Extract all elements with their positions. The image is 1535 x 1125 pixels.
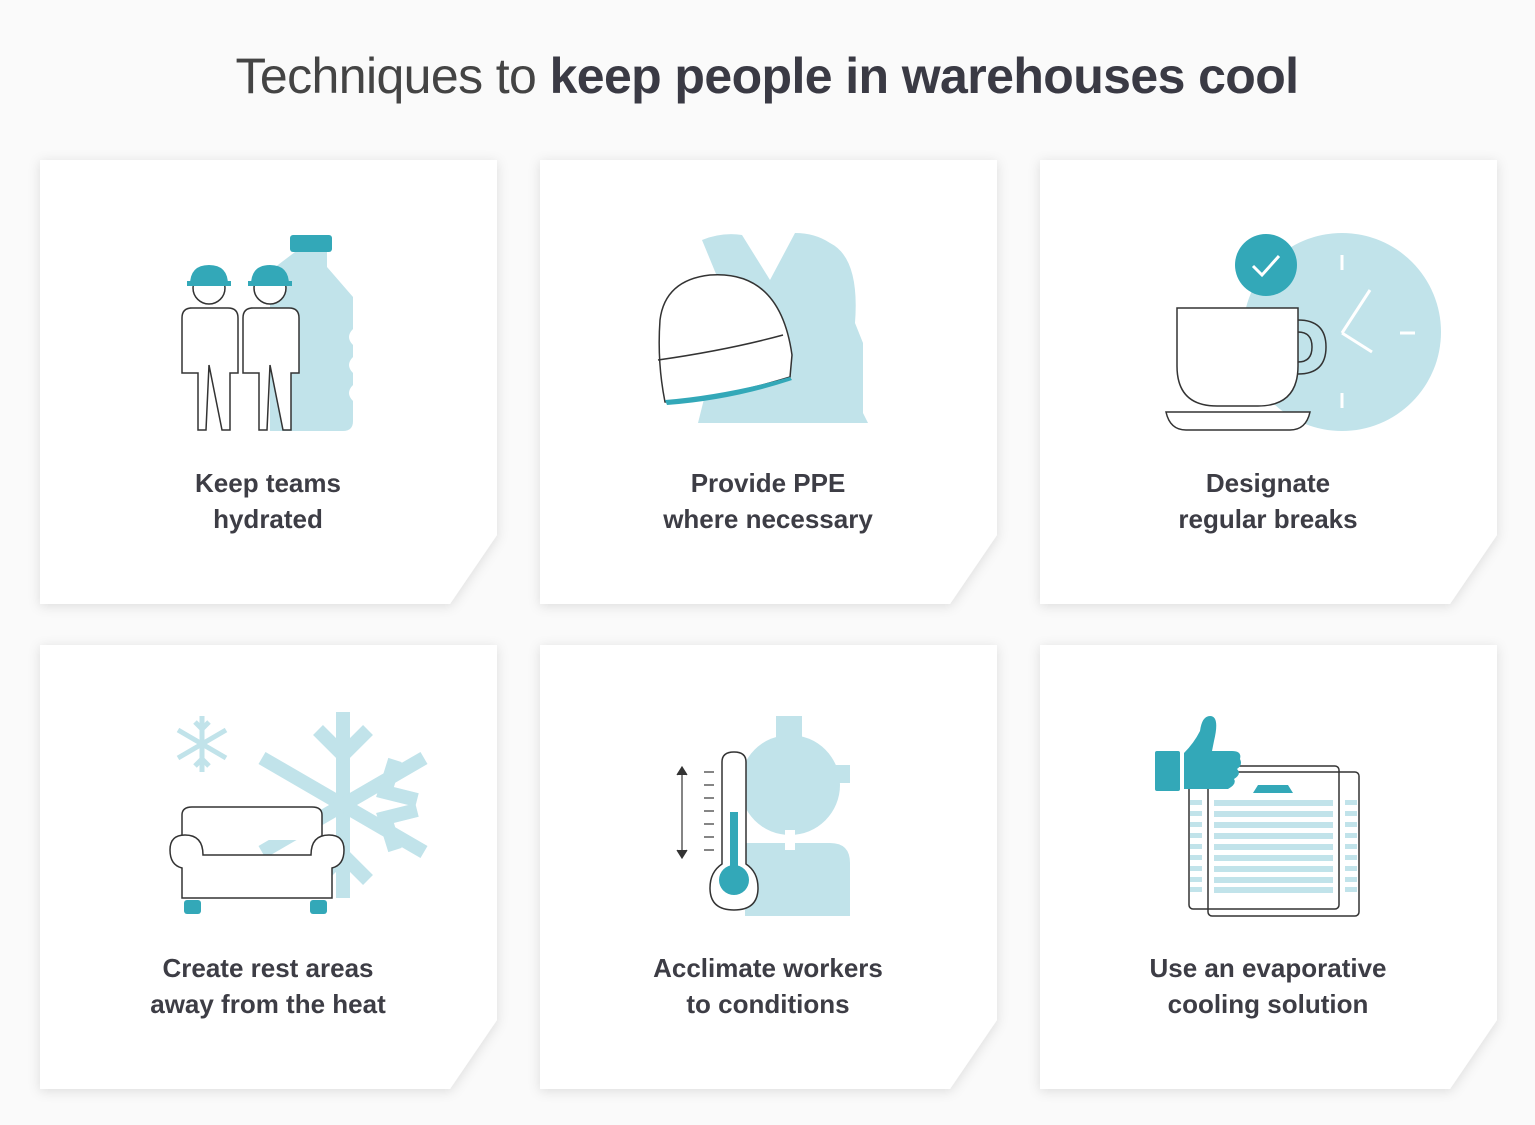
icon: cup and clock: [1166, 233, 1441, 431]
icon: cooler with thumbs up: [1155, 716, 1359, 916]
label: regular breaks: [1178, 504, 1358, 534]
panel: breaks: [1040, 160, 1497, 604]
panel: acclimate: [540, 645, 997, 1089]
icon: sofa and snowflakes: [170, 712, 424, 914]
icon: workers and bottle: [182, 235, 353, 431]
label: Create rest areas: [162, 953, 374, 983]
panel: evaporative cooling: [1040, 645, 1497, 1089]
label: cooling solution: [1168, 989, 1368, 1019]
label: hydrated: [213, 504, 323, 534]
icon: vest and hat: [658, 233, 868, 423]
label: Acclimate workers: [653, 953, 883, 983]
label: Provide PPE: [691, 468, 845, 498]
panel: rest areas: [40, 645, 497, 1089]
label: to conditions: [686, 989, 850, 1019]
label: where necessary: [662, 504, 873, 534]
label: Designate: [1206, 468, 1330, 498]
label: Keep teams: [195, 468, 341, 498]
icon: worker and thermometer: [677, 716, 850, 916]
label: away from the heat: [150, 989, 386, 1019]
panel: PPE: [540, 160, 997, 604]
panel: hydrated: [40, 160, 497, 604]
label: Use an evaporative: [1149, 953, 1387, 983]
title: Techniques to keep people in warehouses cool: [236, 48, 1298, 104]
